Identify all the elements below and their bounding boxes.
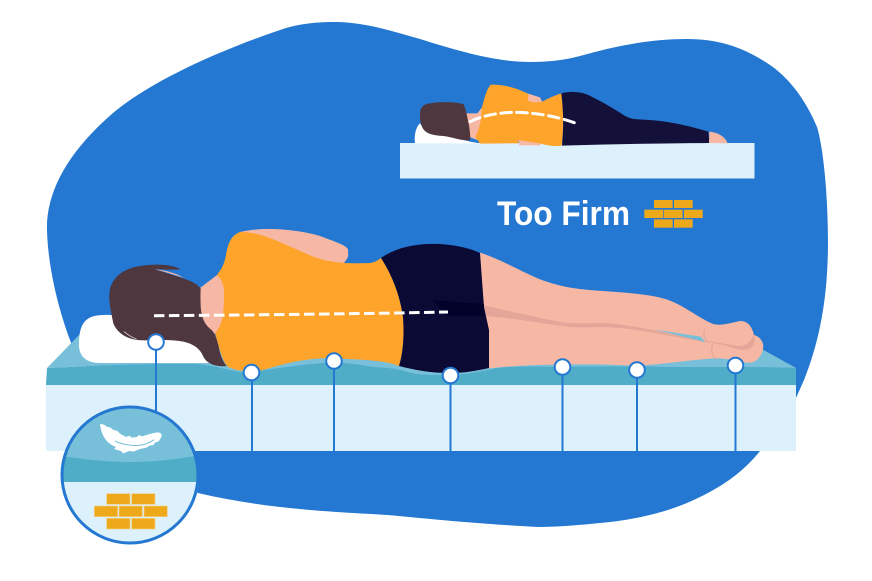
small figure scene: too firm mattress bbox=[400, 85, 754, 178]
icon: feather bbox=[100, 424, 162, 453]
legs and feet bbox=[480, 253, 763, 368]
pressure point markers bbox=[148, 334, 743, 451]
callout layers bbox=[64, 408, 196, 542]
mattress comfort layer top surface bbox=[47, 334, 796, 375]
mattress firm base bbox=[46, 385, 796, 451]
small sleeping figure bbox=[415, 85, 728, 146]
small mattress bbox=[400, 143, 754, 178]
mattress comfort layer side bbox=[46, 363, 796, 385]
large sleeping figure bbox=[79, 229, 763, 373]
shorts bbox=[381, 244, 489, 373]
heading: Too Firm: Too Firm bbox=[497, 195, 630, 233]
blue background blob bbox=[47, 22, 828, 527]
neck bbox=[200, 275, 235, 334]
shirt bbox=[215, 232, 404, 371]
icon: bricks in callout bbox=[94, 494, 167, 529]
callout ring bbox=[62, 407, 198, 543]
raised arm bbox=[240, 229, 348, 263]
shorts shadow bbox=[432, 300, 484, 316]
hair bbox=[109, 265, 227, 366]
large mattress bbox=[46, 334, 796, 451]
spine line bbox=[154, 312, 448, 316]
icon: bricks next to heading bbox=[644, 200, 703, 228]
pillow bbox=[79, 315, 212, 363]
magnified circle callout bbox=[60, 405, 200, 547]
